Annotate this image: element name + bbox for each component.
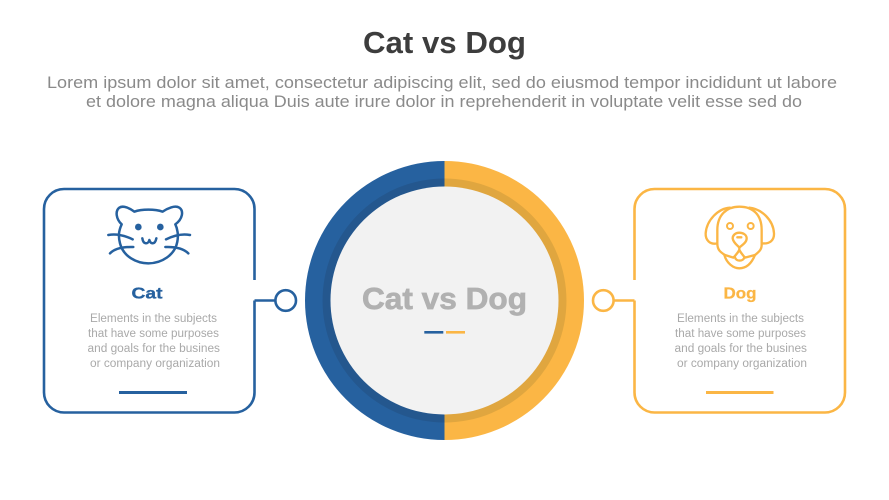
cat bar <box>119 391 187 394</box>
ring: dog half <box>444 161 584 440</box>
centre label: Cat vs Dog <box>362 282 527 316</box>
cat body text: Elements in the subjects <box>90 313 217 325</box>
panel: dog <box>593 189 845 412</box>
cat body text <box>88 313 220 370</box>
subtitle: Lorem ipsum dolor sit amet, consectetur adipiscing elit, sed do eiusmod tempor incididunt ut labore <box>47 74 837 92</box>
inner shade: dog half <box>444 178 566 422</box>
inner shade: cat half <box>323 178 444 422</box>
subtitle <box>47 74 837 111</box>
connector <box>614 299 634 302</box>
inner disc <box>330 186 558 414</box>
icon: dog <box>706 207 774 268</box>
connector node <box>593 290 614 311</box>
cat heading: Cat <box>132 286 163 302</box>
central circle <box>305 161 584 440</box>
panel outline <box>44 189 254 412</box>
dog body text: that have some purposes <box>675 328 806 340</box>
ring: cat half <box>305 161 444 440</box>
connector <box>254 299 275 302</box>
centre dash: cat <box>424 331 443 334</box>
title: Cat vs Dog <box>363 25 526 60</box>
cat body text: and goals for the busines <box>88 343 220 355</box>
cat body text: that have some purposes <box>88 328 219 340</box>
dog heading: Dog <box>724 286 756 302</box>
dog body text <box>674 313 807 370</box>
dog body text: or company organization <box>677 358 807 370</box>
panel: cat <box>44 189 296 412</box>
cat body text: or company organization <box>90 358 220 370</box>
connector node <box>275 290 296 311</box>
dog body text: Elements in the subjects <box>677 313 804 325</box>
icon: cat <box>108 207 190 263</box>
dog body text: and goals for the busines <box>674 343 807 355</box>
panel outline <box>634 189 845 412</box>
dog bar <box>706 391 774 394</box>
subtitle: et dolore magna aliqua Duis aute irure dolor in reprehenderit in voluptate velit esse sed do <box>86 93 802 111</box>
centre dash: dog <box>446 331 465 334</box>
